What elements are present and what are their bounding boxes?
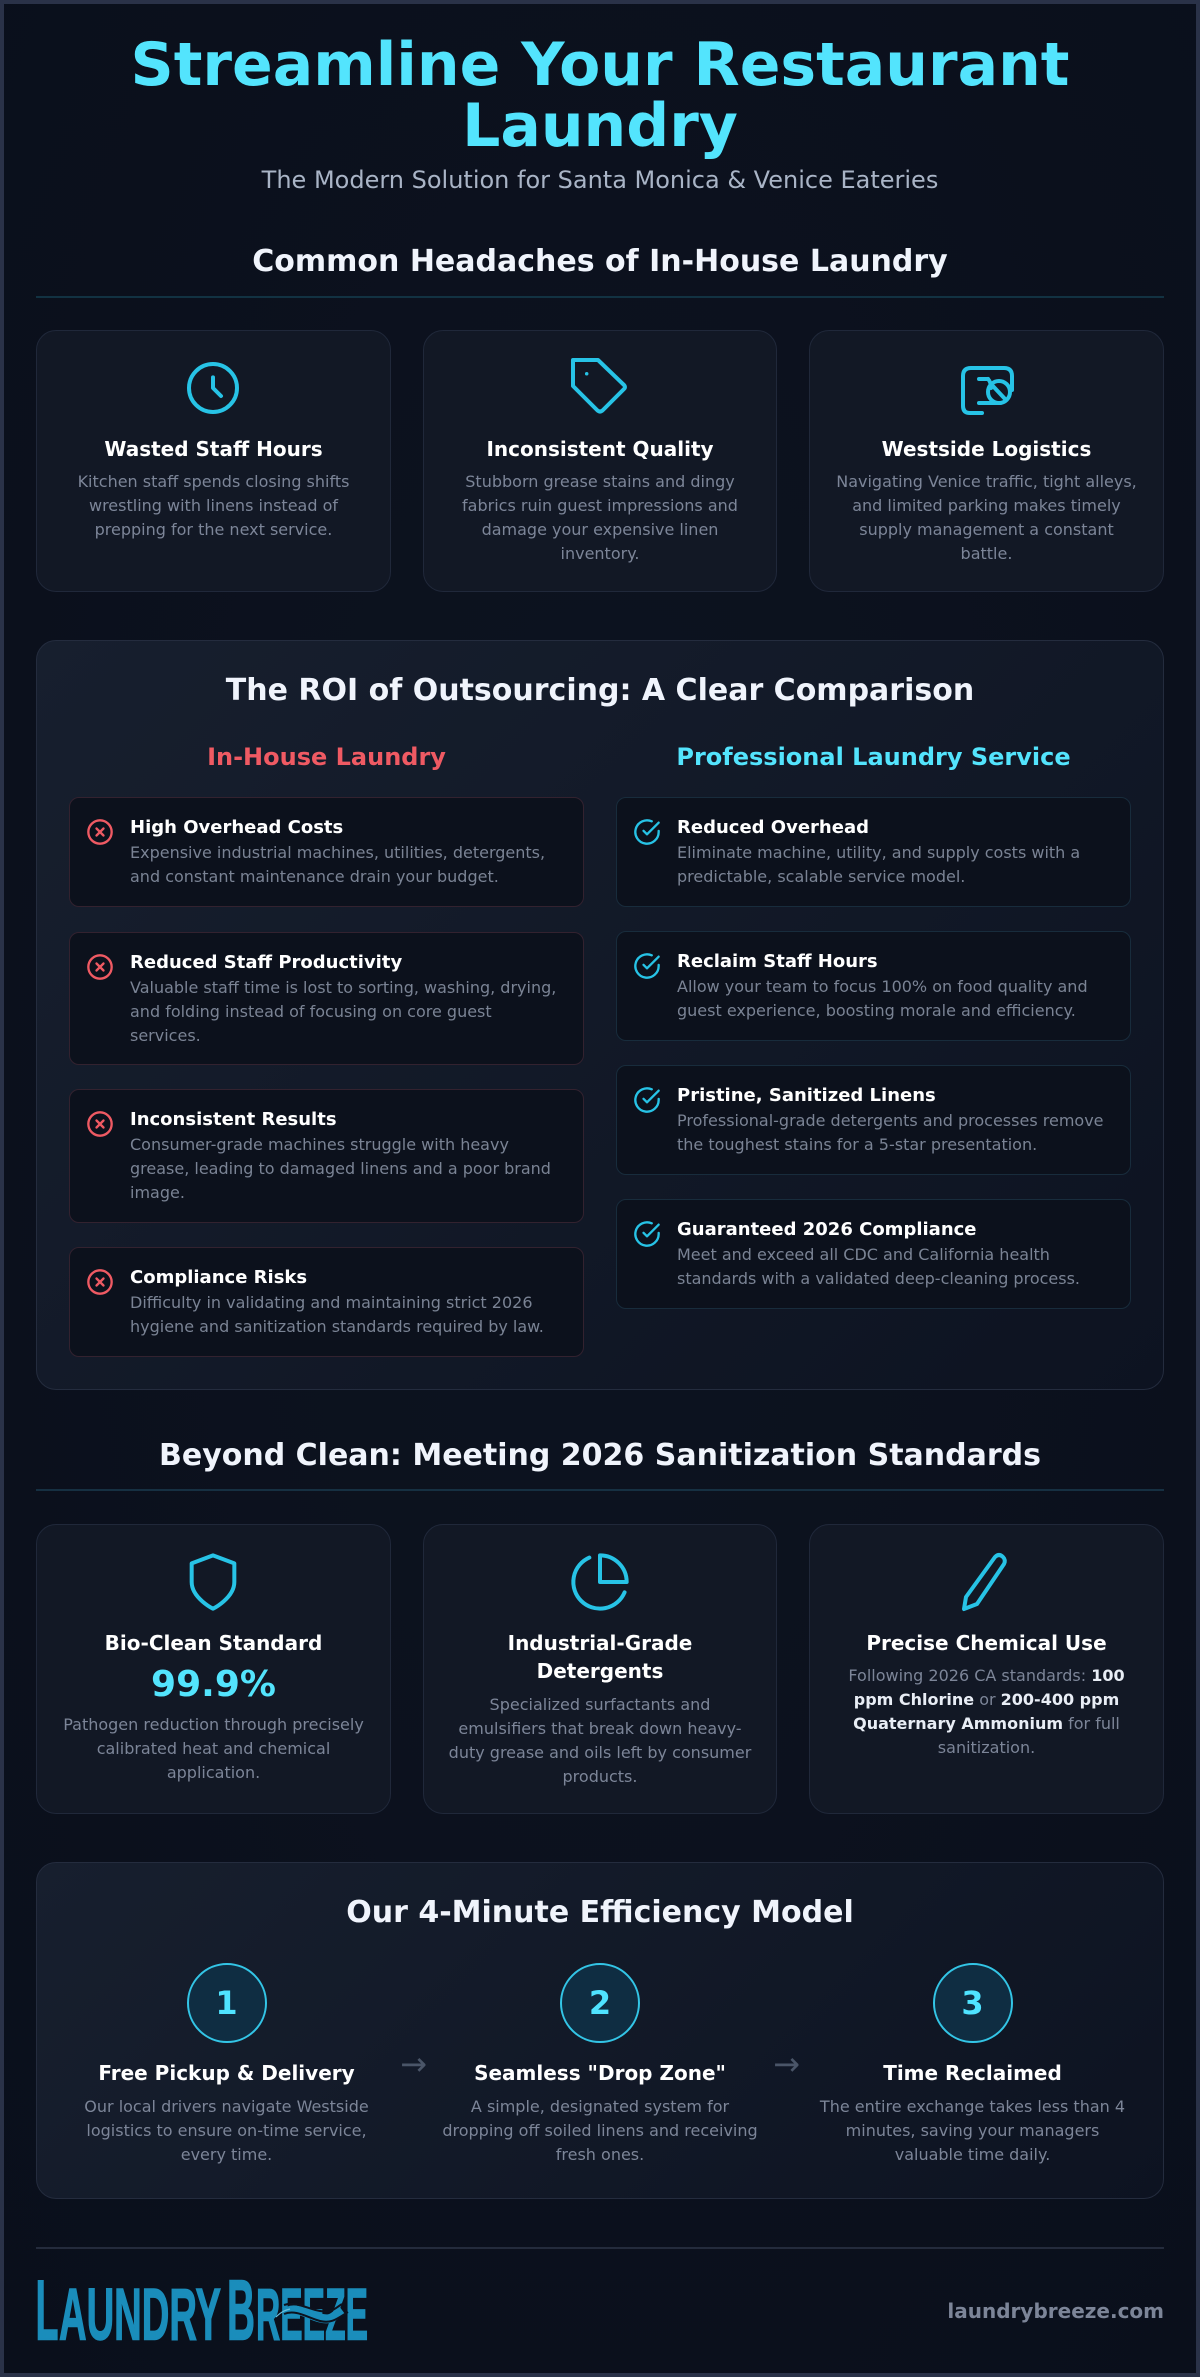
subtitle: The Modern Solution for Santa Monica & Venice Eateries <box>262 166 938 194</box>
step 1 number: 1 <box>215 1984 238 2022</box>
step 3 text: The entire exchange takes less than 4 <box>820 2097 1125 2116</box>
icon: pie <box>571 1553 629 1611</box>
row: high overhead costs: and constant maintenance drain your budget. <box>130 867 499 886</box>
row: pristine linens: the toughest stains for a 5-star presentation. <box>677 1135 1037 1154</box>
card text: detergents <box>449 1694 752 1786</box>
row: reduced staff productivity: Reduced Staff Productivity <box>130 952 402 973</box>
step 1 number <box>186 1963 266 2043</box>
row: reduced overhead: Reduced Overhead <box>677 817 869 838</box>
card heading: wasted staff hours: Wasted Staff Hours <box>104 437 323 461</box>
card heading: westside logistics: Westside Logistics <box>882 437 1091 461</box>
step 2 number: 2 <box>589 1984 611 2022</box>
row: reduced staff productivity: and folding instead of focusing on core guest <box>130 1002 492 1021</box>
arrow 2: → <box>773 2045 800 2083</box>
card text: chemical use <box>848 1666 1125 1757</box>
panel: chemical use <box>809 1524 1164 1814</box>
row: inconsistent results: Inconsistent Results <box>130 1109 337 1130</box>
step 3 text <box>820 2097 1125 2164</box>
card text: westside logistics: supply management a constant <box>859 520 1114 539</box>
step 3 text: valuable time daily. <box>895 2145 1050 2164</box>
step 3 text: minutes, saving your managers <box>846 2121 1099 2140</box>
step 2 text: fresh ones. <box>556 2145 644 2164</box>
card text: westside logistics <box>836 472 1137 563</box>
arrow 1: → <box>400 2045 427 2083</box>
icon: tag <box>571 358 627 414</box>
card text: detergents: emulsifiers that break down heavy- <box>458 1718 742 1738</box>
card text: wasted staff hours: Kitchen staff spends closing shifts <box>78 472 349 491</box>
step 3 number: 3 <box>961 1984 984 2022</box>
step 3 number <box>932 1963 1012 2043</box>
row: reduced overhead: Eliminate machine, utility, and supply costs with a <box>677 843 1080 862</box>
row: guaranteed compliance: standards with a validated deep-cleaning process. <box>677 1269 1080 1288</box>
panel: inconsistent quality <box>423 330 777 592</box>
row: guaranteed compliance: Meet and exceed all CDC and California health <box>677 1245 1050 1264</box>
row: reduced staff productivity <box>69 932 584 1065</box>
icon: clock <box>187 362 239 414</box>
row: compliance risks: Compliance Risks <box>130 1267 307 1288</box>
row: inconsistent results <box>69 1089 584 1223</box>
row: reclaim staff hours: Reclaim Staff Hours <box>677 951 878 972</box>
row: guaranteed compliance <box>616 1199 1131 1309</box>
panel: efficiency model <box>36 1862 1164 2199</box>
card text: inconsistent quality: Stubborn grease stains and dingy <box>465 472 735 491</box>
card text: inconsistent quality: damage your expensive linen <box>482 520 718 539</box>
step 2 text: A simple, designated system for <box>471 2097 729 2116</box>
row: reclaim staff hours <box>616 931 1131 1041</box>
icon: logistics <box>961 366 1014 415</box>
row: guaranteed compliance: Guaranteed 2026 Compliance <box>677 1219 977 1240</box>
icon: shield <box>190 1553 236 1611</box>
card text: bio-clean: Pathogen reduction through precisely <box>63 1715 364 1734</box>
card text: detergents: Specialized surfactants and <box>490 1694 710 1714</box>
panel: bio-clean <box>36 1524 391 1814</box>
title: Laundry <box>462 91 738 161</box>
row: high overhead costs <box>69 797 584 907</box>
step 2 text <box>442 2097 758 2164</box>
card text: inconsistent quality <box>462 472 738 563</box>
row: reduced staff productivity: services. <box>130 1026 201 1045</box>
row: reclaim staff hours: Allow your team to focus 100% on food quality and <box>677 977 1088 996</box>
row: compliance risks: hygiene and sanitization standards required by law. <box>130 1317 544 1336</box>
card text: westside logistics: and limited parking makes timely <box>852 496 1121 515</box>
card text: bio-clean: calibrated heat and chemical <box>97 1739 330 1758</box>
step 1 text: Our local drivers navigate Westside <box>84 2097 369 2116</box>
card text: bio-clean <box>63 1715 364 1782</box>
card text: inconsistent quality: inventory. <box>561 544 639 563</box>
panel: roi comparison <box>36 640 1164 1390</box>
card text: inconsistent quality: fabrics ruin guest impressions and <box>462 496 738 515</box>
card text: chemical use: ppm Chlorine or 200-400 ppm <box>854 1690 1119 1709</box>
card text: wasted staff hours <box>78 472 349 539</box>
row: reduced overhead <box>616 797 1131 907</box>
step 1 text: every time. <box>181 2145 272 2164</box>
title: Streamline Your Restaurant <box>131 30 1069 100</box>
row: inconsistent results: Consumer-grade machines struggle with heavy <box>130 1135 509 1154</box>
panel: wasted staff hours <box>36 330 391 592</box>
row: high overhead costs: High Overhead Costs <box>130 817 343 838</box>
step 3 title: Time Reclaimed <box>883 2061 1062 2085</box>
card text: detergents: products. <box>563 1766 637 1786</box>
card text: bio-clean: application. <box>167 1763 260 1782</box>
card heading: detergents: Detergents <box>537 1659 663 1683</box>
card text: westside logistics: Navigating Venice traffic, tight alleys, <box>836 472 1137 491</box>
row: reduced staff productivity: Valuable staff time is lost to sorting, washing, drying, <box>130 978 556 997</box>
step 1 title: Free Pickup & Delivery <box>98 2061 355 2085</box>
step 1 text <box>84 2097 369 2164</box>
row: pristine linens: Professional-grade detergents and processes remove <box>677 1111 1104 1130</box>
row: compliance risks: Difficulty in validating and maintaining strict 2026 <box>130 1293 533 1312</box>
row: high overhead costs: Expensive industrial machines, utilities, detergents, <box>130 843 545 862</box>
column heading: professional: Professional Laundry Service <box>676 743 1071 771</box>
title <box>131 30 1069 161</box>
panel: detergents <box>423 1524 777 1814</box>
step 1 text: logistics to ensure on-time service, <box>86 2121 367 2140</box>
row: pristine linens: Pristine, Sanitized Linens <box>677 1085 936 1106</box>
card heading: detergents: Industrial-Grade <box>508 1631 692 1655</box>
step 2 text: dropping off soiled linens and receiving <box>442 2121 758 2140</box>
heading: common headaches: Common Headaches of In-House Laundry <box>252 244 948 278</box>
stat: 99.9%: 99.9% <box>151 1664 276 1705</box>
row: reclaim staff hours: guest experience, boosting morale and efficiency. <box>677 1001 1076 1020</box>
card text: chemical use: Following 2026 CA standards: 100 <box>848 1666 1125 1685</box>
heading: beyond clean: Beyond Clean: Meeting 2026 Sanitization Standards <box>159 1438 1041 1472</box>
card text: detergents: duty grease and oils left by consumer <box>449 1742 751 1762</box>
card text: wasted staff hours: wrestling with linens instead of <box>89 496 338 515</box>
row: reduced overhead: predictable, scalable service model. <box>677 867 965 886</box>
footer url: laundrybreeze.com <box>947 2298 1164 2322</box>
icon: pen <box>962 1552 1007 1612</box>
heading: efficiency model: Our 4-Minute Efficiency Model <box>346 1895 854 1930</box>
card heading: detergents <box>508 1631 692 1683</box>
card text: chemical use: Quaternary Ammonium for full <box>853 1714 1120 1733</box>
panel: westside logistics <box>809 330 1164 592</box>
row: pristine linens <box>616 1065 1131 1175</box>
card text: westside logistics: battle. <box>961 544 1012 563</box>
card text: chemical use: sanitization. <box>938 1738 1035 1757</box>
column heading: in-house: In-House Laundry <box>207 743 446 771</box>
card heading: inconsistent quality: Inconsistent Quality <box>486 437 714 461</box>
card heading: bio-clean: Bio-Clean Standard <box>105 1631 322 1655</box>
row: inconsistent results: image. <box>130 1183 185 1202</box>
step 2 number <box>560 1963 640 2043</box>
row: compliance risks <box>69 1247 584 1357</box>
card heading: chemical use: Precise Chemical Use <box>866 1631 1107 1655</box>
step 2 title: Seamless "Drop Zone" <box>474 2061 726 2085</box>
card text: wasted staff hours: prepping for the next service. <box>95 520 332 539</box>
row: inconsistent results: grease, leading to damaged linens and a poor brand <box>130 1159 551 1178</box>
heading: roi: The ROI of Outsourcing: A Clear Comparison <box>226 672 974 708</box>
